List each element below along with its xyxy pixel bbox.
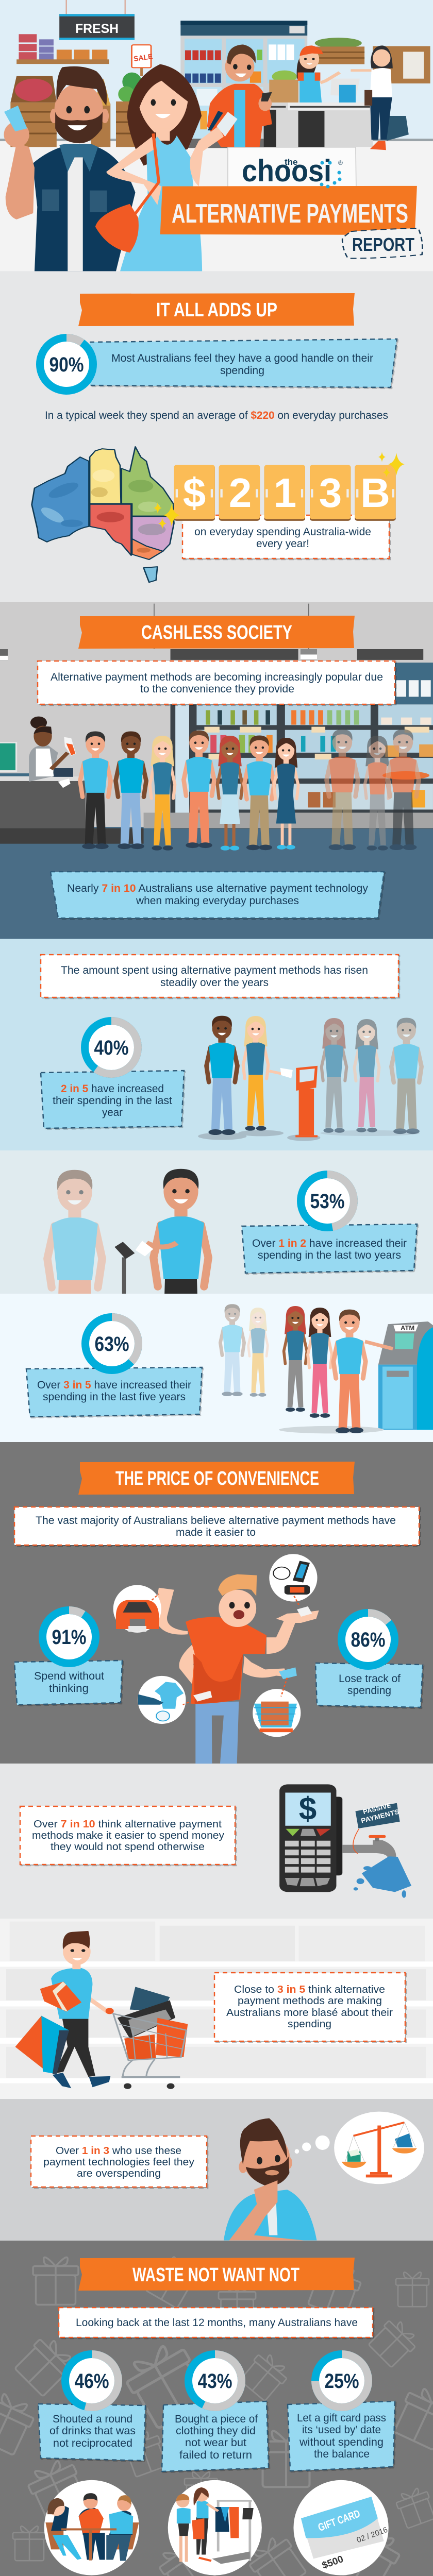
- section background cover: [0, 1294, 433, 1442]
- text: Lose track of: [339, 1673, 401, 1685]
- donut: 43%: [189, 2354, 241, 2407]
- text: [32, 1819, 224, 1853]
- people at payment kiosk: [198, 1016, 422, 1141]
- donut: 40%: [85, 1021, 138, 1074]
- icon: clothes circle: [138, 1676, 186, 1724]
- text: Over 1 in 3 who use these: [56, 2145, 181, 2157]
- donut: 86%: [341, 1613, 395, 1666]
- box: [26, 1367, 202, 1417]
- text: Over 3 in 5 have increased their: [37, 1379, 191, 1391]
- text: [37, 1379, 191, 1403]
- callout box: vast majority: [14, 1507, 419, 1545]
- text: payment methods are making: [238, 1995, 382, 2007]
- donut: 46%: [65, 2354, 119, 2407]
- text: year: [102, 1107, 123, 1118]
- text: thinking: [49, 1683, 89, 1694]
- text: weekly spend: In a typical week they spend an average of $220 on everyday purchases: [45, 410, 388, 421]
- callout text: Most Australians feel they have a good handle on their: [111, 352, 373, 364]
- logo: the choosi: ®: [338, 159, 343, 166]
- box: [315, 1663, 423, 1707]
- text: spending in the last two years: [258, 1249, 401, 1261]
- text: methods make it easier to spend money: [32, 1830, 224, 1841]
- figure: $213B: $: [183, 470, 206, 516]
- panel: 90 percent stat: [40, 338, 397, 391]
- box: [214, 1973, 405, 2041]
- shelves background: [0, 1922, 433, 2083]
- panel: 86 percent: [315, 1613, 423, 1707]
- text: Let a gift card pass: [297, 2412, 386, 2424]
- drinks fridge: [180, 21, 307, 148]
- donut: 53%: 53%: [310, 1190, 344, 1213]
- panel: 40 percent: [41, 1021, 184, 1128]
- callout text line 2: steadily over the years: [160, 977, 269, 989]
- text: not wear but: [185, 2437, 246, 2449]
- person: woman with orange bag and cards: [95, 64, 238, 271]
- callout box: amount spent: [41, 955, 398, 997]
- text: Alternative payment methods are becoming increasingly popular due: [51, 671, 383, 683]
- donut: 63%: 63%: [95, 1333, 129, 1355]
- icon: payment terminal with money tap: [279, 1784, 411, 1898]
- panel: header shop illustration: [0, 0, 433, 271]
- panel: 25 percent: [288, 2354, 395, 2471]
- text: [339, 1673, 401, 1697]
- people at ATM: [220, 1304, 393, 1433]
- text: [34, 1670, 104, 1694]
- box: [31, 2136, 207, 2187]
- heading: cashless society: [78, 616, 355, 649]
- person: man in orange jacket: [207, 44, 272, 147]
- icon: shopping cart: [113, 1987, 188, 2089]
- donut: 91%: [42, 1611, 96, 1663]
- icon: groceries circle: [253, 1689, 301, 1737]
- text: Over 7 in 10 think alternative payment: [34, 1819, 222, 1830]
- gift pattern background: [0, 2241, 433, 2576]
- figure: $213B: 1: [274, 470, 296, 516]
- callout box: looking back: [59, 2308, 373, 2337]
- callout box: [90, 339, 397, 387]
- heading: waste not want not: [78, 2258, 355, 2291]
- report badge: [342, 228, 423, 258]
- icon: ATM: [279, 1321, 433, 1433]
- text: of drinks that was: [49, 2425, 136, 2437]
- donut: 63%: [86, 1317, 138, 1370]
- donut: 91%: 91%: [52, 1626, 87, 1649]
- text: Spend without: [34, 1670, 104, 1682]
- illustration: women clothes shopping: [168, 2480, 262, 2575]
- flip tiles: [174, 465, 396, 521]
- callout text line 2: spending: [220, 365, 264, 377]
- logo: the choosi: choosi: [242, 154, 331, 188]
- checkout counter: [264, 79, 373, 147]
- text: payment technologies feel they: [43, 2157, 194, 2168]
- text: [252, 1238, 407, 1261]
- donut: 40%: 40%: [94, 1037, 129, 1059]
- box: [38, 661, 395, 704]
- text: Over 1 in 2 have increased their: [252, 1238, 407, 1249]
- person: thinking man: [224, 2118, 317, 2241]
- heading: it all adds up: IT ALL ADDS UP: [156, 299, 277, 321]
- text: 2 in 5 have increased: [61, 1083, 164, 1095]
- illustration: gift card: $500: [321, 2554, 345, 2571]
- logo: the choosi: the: [285, 157, 298, 167]
- icon: scales thought bubble: [295, 2112, 424, 2184]
- text: fresh sign: FRESH: [75, 22, 119, 36]
- figure: $213B: 3: [319, 470, 342, 516]
- donut: 43%: 43%: [198, 2370, 232, 2393]
- text: ATM: ATM: [401, 1324, 414, 1332]
- illustration: gift card: 02 / 2016: [356, 2526, 389, 2545]
- callout text line 2: made it easier to: [176, 1527, 256, 1538]
- panel: 53 percent: [47, 1169, 417, 1381]
- text: [175, 2413, 258, 2461]
- heading: the price of convenience: [78, 1462, 355, 1495]
- box: [162, 2401, 269, 2471]
- queue of customers: [80, 730, 419, 851]
- person: shopper with bags: [15, 1931, 114, 2088]
- icon: taxi circle: [113, 1585, 161, 1633]
- text: [53, 1083, 172, 1118]
- grocery bag: [269, 71, 298, 103]
- icon: fresh sign board: [59, 14, 135, 40]
- donut: 25%: [315, 2354, 368, 2407]
- callout: alternative payments popular: [38, 661, 395, 704]
- callout text line 2: when making everyday purchases: [136, 895, 299, 907]
- donut: 86%: 86%: [351, 1629, 386, 1651]
- heading: cashless society: CASHLESS SOCIETY: [141, 622, 292, 643]
- panel: 63 percent: [26, 1317, 202, 1417]
- donut: 90%: [40, 338, 93, 391]
- panel: 91 percent: [14, 1611, 122, 1705]
- callout text: 7 in 10: Nearly 7 in 10 Australians use alternative payment technology: [67, 883, 369, 894]
- illustration: friends at cafe table: [44, 2480, 139, 2575]
- icon: sparkles: [154, 452, 405, 529]
- planter and noticeboard: [315, 38, 430, 83]
- text: Close to 3 in 5 think alternative: [234, 1984, 385, 1995]
- callout text: vast majority: The vast majority of Australians believe alternative payment methods have: [36, 1515, 396, 1527]
- panel: 46 percent: [38, 2354, 145, 2461]
- heading: it all adds up: [78, 293, 355, 326]
- logo card: [228, 147, 356, 195]
- text: are overspending: [77, 2168, 161, 2179]
- text: spending: [347, 1685, 391, 1697]
- people at terminal: [47, 1169, 208, 1381]
- text: passive payments tag: [358, 1800, 400, 1825]
- donut: 46%: 46%: [74, 2370, 109, 2393]
- text: spending: [288, 2019, 331, 2030]
- text: [297, 2412, 386, 2460]
- icon: kiosk: [269, 1066, 318, 1137]
- callout text: looking back: Looking back at the last 12 months, many Australians have: [76, 2317, 358, 2329]
- icon: gadgets circle: [269, 1554, 318, 1602]
- panel: 7 in 10 spend money: [20, 1806, 235, 1865]
- map of Australia: [32, 447, 174, 582]
- callout text line 2: every year!: [256, 538, 309, 550]
- box: [14, 1660, 122, 1705]
- text: Shouted a round: [53, 2413, 132, 2425]
- figure: $213B: [183, 470, 390, 516]
- person: bearded man holding card: [4, 66, 135, 271]
- box: [38, 2404, 145, 2461]
- illustration: gift card: GIFT CARD: [317, 2507, 362, 2534]
- box: [20, 1806, 235, 1865]
- sale sign: [132, 45, 151, 76]
- donut: 25%: 25%: [325, 2370, 359, 2393]
- text: [43, 2145, 194, 2179]
- heading: the price of convenience: THE PRICE OF CONVENIENCE: [115, 1468, 319, 1489]
- panel: 213 billion flip counter: [174, 465, 396, 558]
- text: Australians more blasé about their: [226, 2007, 393, 2019]
- panel: blase shopper: [0, 1922, 433, 2089]
- text: not reciprocated: [53, 2437, 132, 2449]
- figure: $213B: B: [360, 470, 390, 516]
- store shelves: [144, 663, 433, 828]
- text: passive payments tag: PAYMENTS: [360, 1808, 400, 1825]
- figure: $213B: 2: [229, 470, 252, 516]
- panel: 1 in 3 overspending: [31, 2112, 424, 2241]
- text: their spending in the last: [53, 1095, 172, 1107]
- checkout counter: [0, 742, 144, 844]
- callout box: 7 in 10: [51, 872, 384, 918]
- heading: waste not want not: WASTE NOT WANT NOT: [132, 2264, 299, 2286]
- text: [226, 1984, 393, 2030]
- text: they would not spend otherwise: [51, 1841, 205, 1853]
- person: cashier: [29, 717, 76, 788]
- text: its ‘used by’ date: [302, 2424, 381, 2436]
- box: [41, 1071, 184, 1128]
- text: failed to return: [179, 2449, 252, 2461]
- produce shelf: [16, 34, 109, 64]
- callout box: [182, 515, 389, 558]
- illustration: gift card: [293, 2480, 393, 2575]
- callout text line 2: to the convenience they provide: [140, 683, 294, 695]
- text: terminal dollar: $: [299, 1791, 317, 1827]
- icon: card terminal: [114, 1241, 177, 1295]
- person: many-armed spender: [113, 1554, 319, 1764]
- text: Bought a piece of: [175, 2413, 258, 2425]
- text: sale sign: SALE: [133, 52, 153, 63]
- donut: 53%: [301, 1175, 354, 1227]
- subtitle: report: REPORT: [352, 234, 414, 255]
- box: [288, 2401, 395, 2471]
- text: [49, 2413, 136, 2449]
- callout text: amount spent: The amount spent using alternative payment methods has risen: [61, 964, 368, 976]
- title ribbon: [160, 186, 417, 235]
- box: [242, 1224, 417, 1273]
- text: the balance: [314, 2448, 370, 2460]
- person: cashier: [297, 45, 340, 103]
- text: clothing they did: [176, 2425, 256, 2437]
- panel: cashless store scene: [0, 604, 433, 844]
- text: without spending: [299, 2436, 384, 2448]
- text: spending in the last five years: [43, 1391, 186, 1403]
- panel: 43 percent: [162, 2354, 269, 2471]
- donut: 90%: 90%: [49, 353, 84, 376]
- fruit crates: [10, 73, 142, 147]
- person: customer with shopping bag: [351, 45, 409, 150]
- text: passive payments tag: PASSIVE: [362, 1801, 392, 1816]
- callout text: on everyday spending Australia-wide: [194, 526, 371, 538]
